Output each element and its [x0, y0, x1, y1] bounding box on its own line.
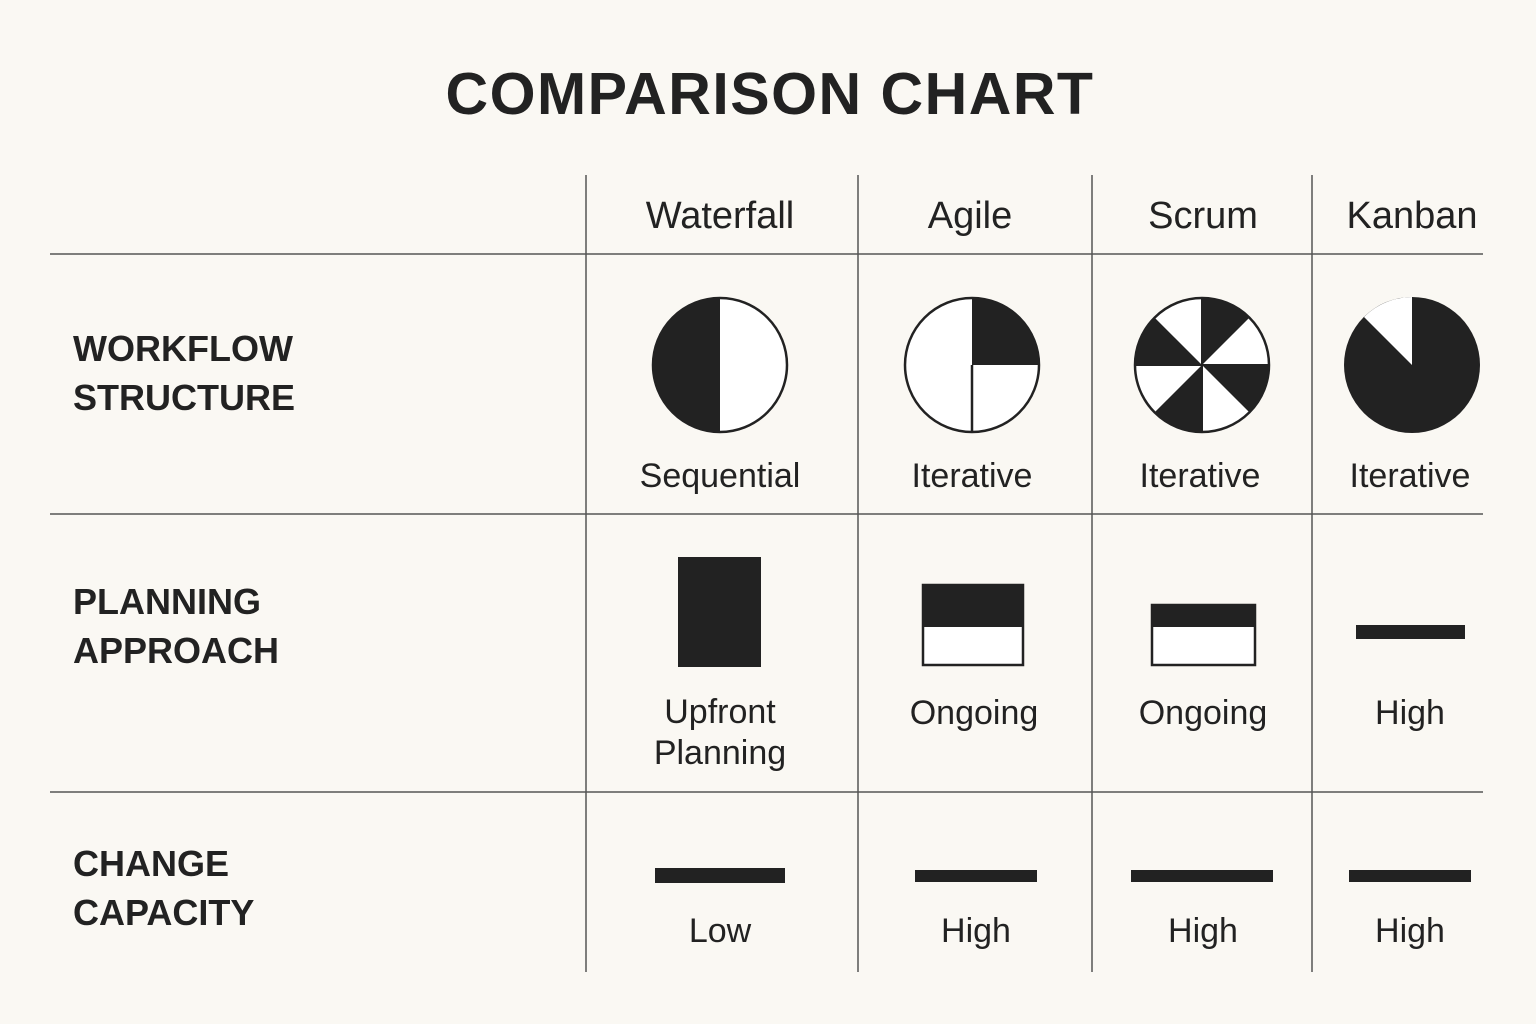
icon: agile planning box: [922, 584, 1024, 665]
row label: workflow structure: WORKFLOW: [73, 328, 293, 369]
row label: workflow structure: [73, 328, 295, 418]
change capacity labels: High: [941, 912, 1011, 950]
change capacity labels: [689, 912, 1445, 950]
workflow labels: [640, 457, 1470, 495]
row label: planning approach: [73, 581, 279, 671]
change capacity labels: Low: [689, 912, 752, 950]
icon: waterfall planning block: [678, 557, 761, 667]
workflow labels: Iterative: [1140, 457, 1260, 495]
row label: planning approach: PLANNING: [73, 581, 261, 622]
row label: change capacity: CHANGE: [73, 843, 229, 884]
row label: workflow structure: STRUCTURE: [73, 377, 295, 418]
row label: change capacity: CAPACITY: [73, 892, 254, 933]
column headers: [646, 195, 1478, 237]
column headers: Scrum: [1148, 195, 1258, 237]
planning labels: Planning: [654, 734, 786, 772]
planning labels: High: [1375, 694, 1445, 732]
icon: scrum planning box: [1151, 604, 1256, 665]
planning labels: Ongoing: [910, 694, 1038, 732]
planning labels: Upfront: [664, 693, 776, 731]
icon: waterfall half circle: [653, 298, 787, 432]
title: COMPARISON CHART: [446, 61, 1094, 127]
workflow labels: Iterative: [1350, 457, 1470, 495]
planning labels: Ongoing: [1139, 694, 1267, 732]
icon: agile quarter circle: [905, 298, 1039, 432]
planning labels: [654, 693, 1445, 772]
row label: planning approach: APPROACH: [73, 630, 279, 671]
row label: change capacity: [73, 843, 254, 933]
icon: kanban planning bar: [1356, 625, 1465, 639]
column headers: Kanban: [1346, 195, 1478, 237]
icon: kanban mostly filled circle: [1344, 297, 1480, 433]
change capacity bars: [655, 868, 1471, 883]
column headers: Agile: [928, 195, 1012, 237]
column headers: Waterfall: [646, 195, 794, 237]
workflow labels: Sequential: [640, 457, 800, 495]
workflow labels: Iterative: [912, 457, 1032, 495]
change capacity labels: High: [1168, 912, 1238, 950]
change capacity labels: High: [1375, 912, 1445, 950]
icon: scrum wedges: [1135, 298, 1269, 432]
